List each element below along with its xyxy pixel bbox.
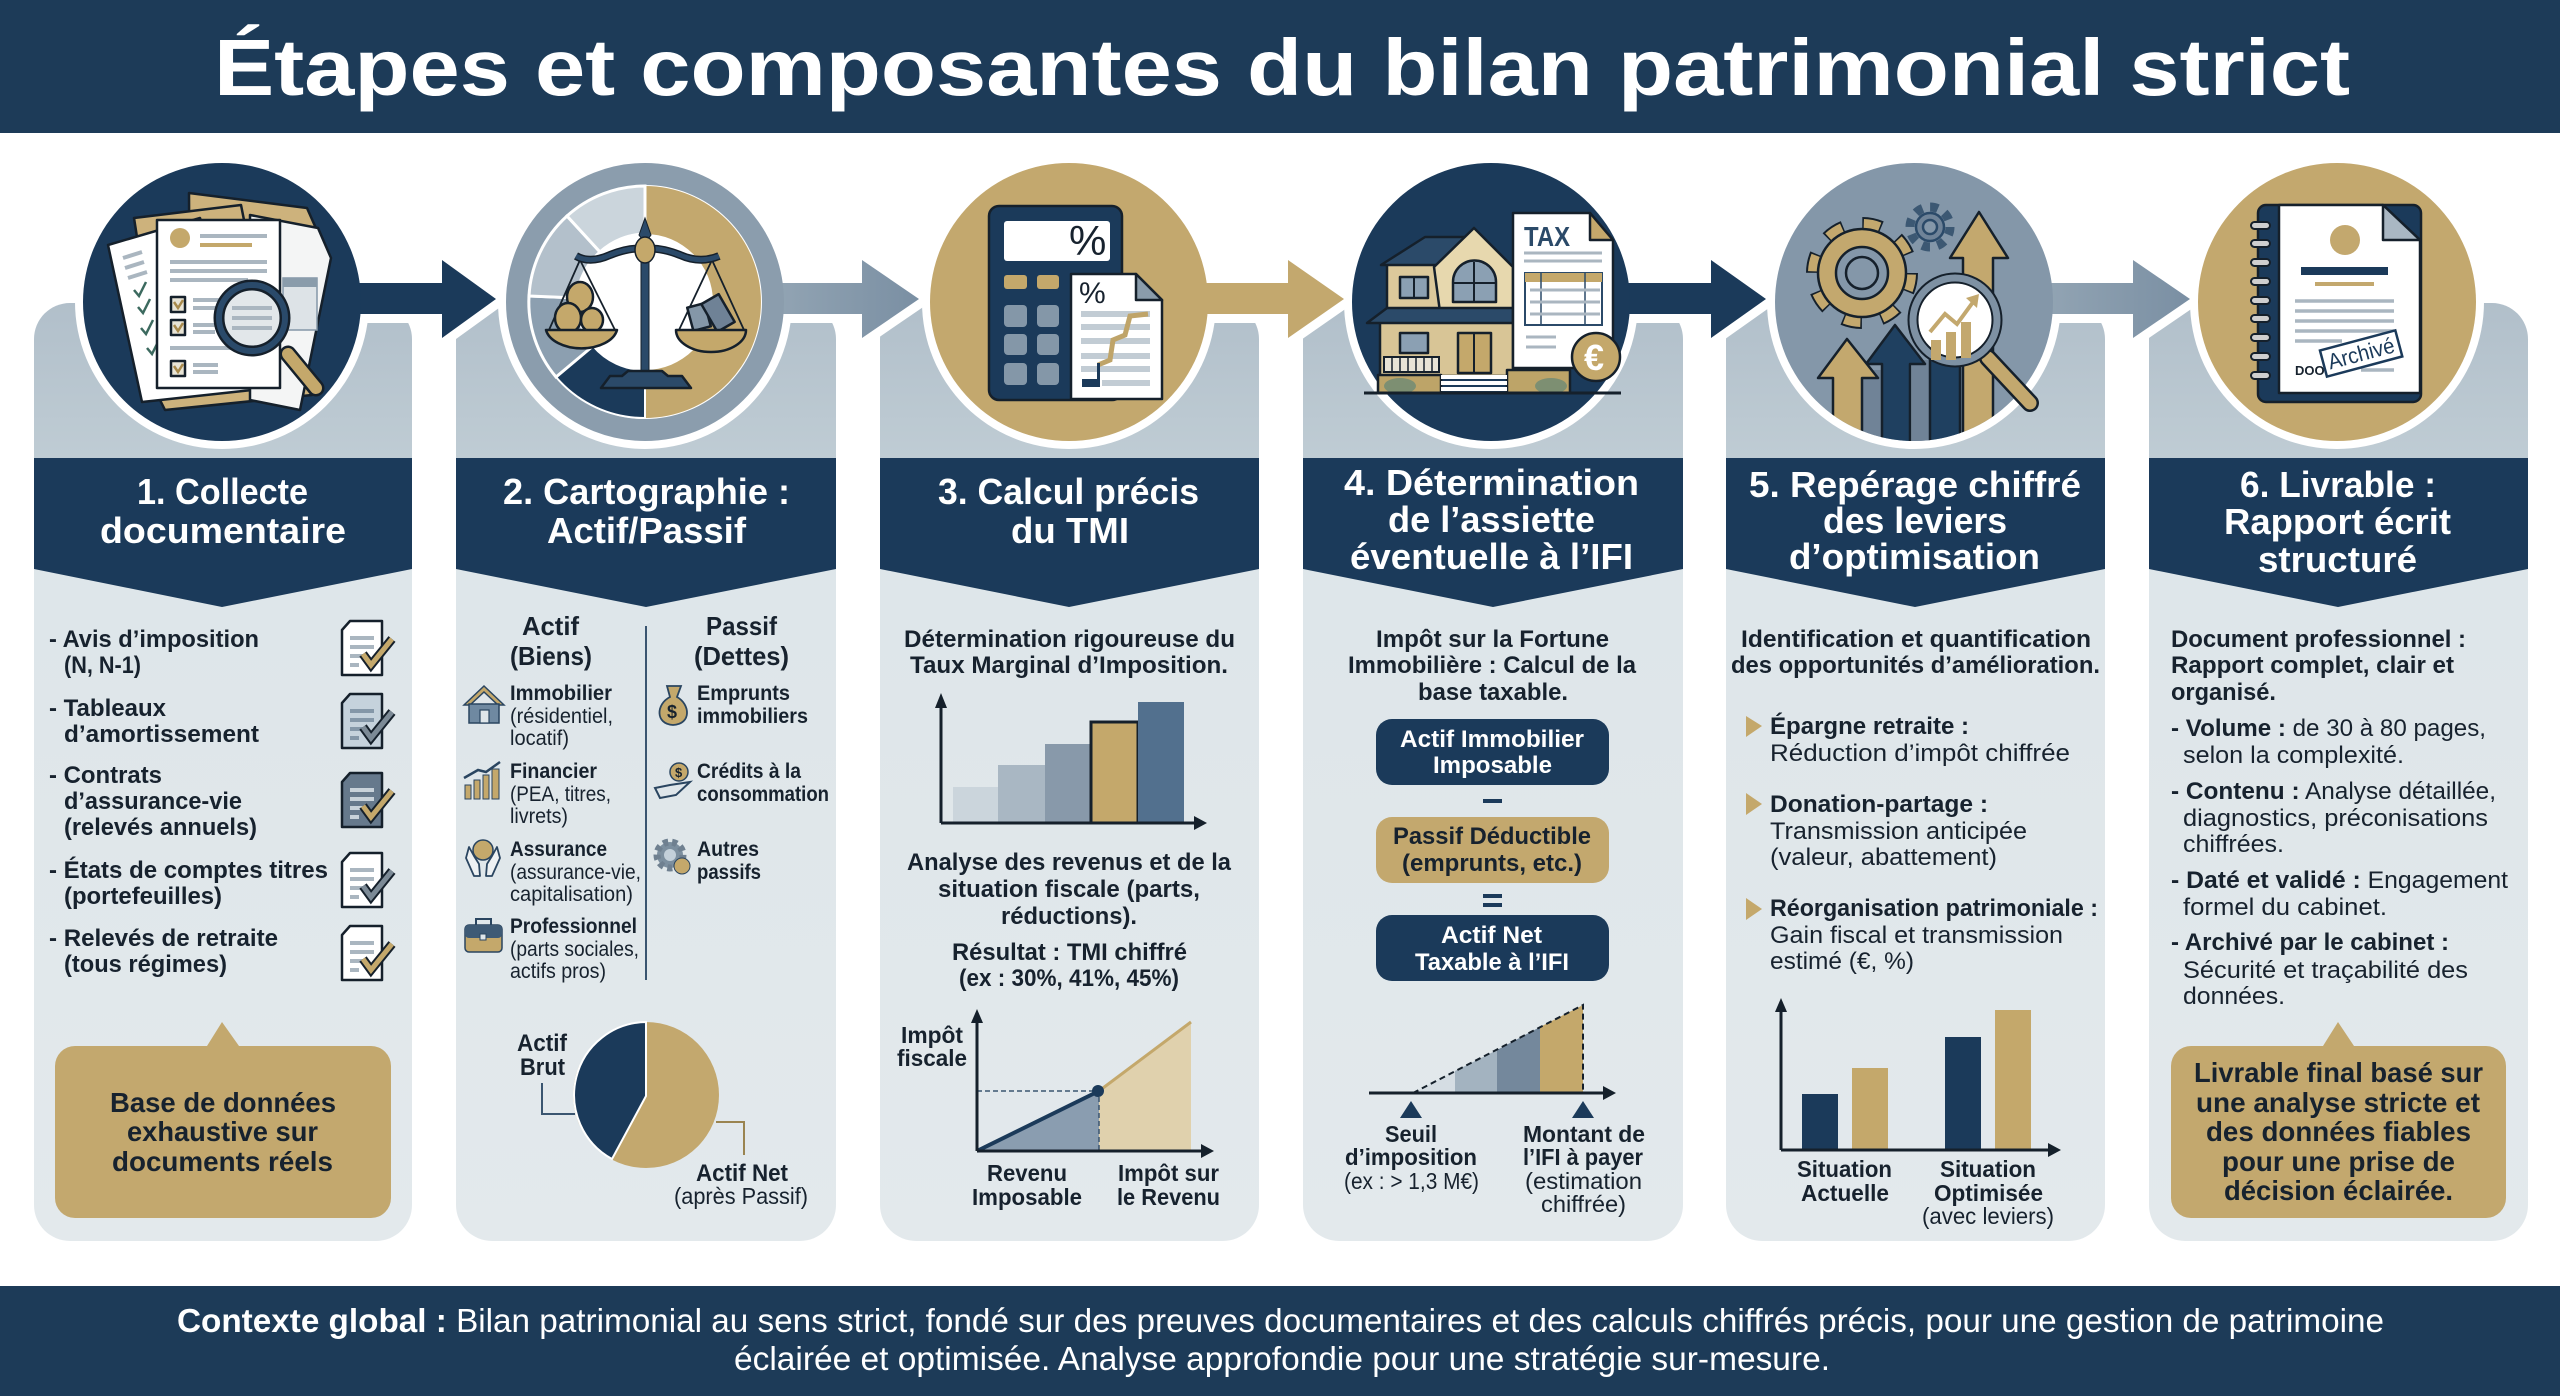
column heads: (Biens) [510,641,592,671]
lever list: Transmission anticipée [1770,818,2027,845]
intro text [1348,626,1637,706]
analysis text [907,849,1232,992]
callout: base de données [55,1022,391,1218]
document list: - États de comptes titres [49,856,328,884]
heading: step 4: éventuelle à l’IFI [1350,536,1633,577]
callout: livrable final: pour une prise de [2222,1146,2455,1177]
document list: - Contrats [49,762,162,789]
passif list: immobiliers [697,705,808,728]
bar chart: situations: Situation [1797,1156,1892,1182]
analysis text: Analyse des revenus et de la [907,849,1232,876]
icon: hand with coin [655,763,690,798]
report details: données. [2183,983,2285,1010]
icon: money bag [659,686,687,725]
callout: livrable final [2171,1022,2506,1218]
column heads: (Dettes) [694,641,789,671]
intro text: Rapport complet, clair et [2171,652,2454,679]
heading: step 6: structuré [2258,539,2417,580]
intro text: Impôt sur la Fortune [1376,626,1609,653]
lever list: Réorganisation patrimoniale : [1770,895,2098,922]
column heads: Passif [706,611,777,641]
chart: barème IFI: Seuil [1385,1121,1437,1147]
report details: - Contenu : Analyse détaillée, [2171,778,2496,805]
actif list: (parts sociales, [510,938,639,961]
passif list: Emprunts [697,682,790,705]
document list: (relevés annuels) [64,814,257,841]
passif list: Autres [697,838,759,861]
icon: document check 1 [342,621,392,675]
formula box: actif net taxable [1376,915,1609,981]
chart: barème IFI: (estimation [1525,1168,1642,1194]
lever list: Donation-partage : [1770,791,1988,818]
icon: hands with coin [466,840,500,876]
icon: balance scale with donut [517,174,773,430]
formula box: actif net taxable: Actif Net [1441,922,1542,949]
intro text: Identification et quantification [1741,626,2091,653]
chart: barème IFI: (ex : > 1,3 M€) [1344,1168,1479,1194]
callout: base de données: documents réels [112,1146,333,1177]
formula box: passif déductible [1376,817,1609,883]
formula box: actif imposable: Actif Immobilier [1400,726,1584,753]
callout: base de données: Base de données [110,1087,336,1118]
panel: 2 cartographie actif passif [456,303,836,1241]
chart: barème IFI: d’imposition [1345,1144,1477,1170]
arrow: step 1 to 2 [340,260,496,338]
report details: - Archivé par le cabinet : [2171,929,2449,956]
heading: step 6: Rapport écrit [2224,501,2451,542]
pie chart: actif brut vs net: Actif Net [696,1160,788,1187]
footer: contexte global [0,1286,2560,1396]
icon: documents and magnifier [83,163,361,441]
report details: chiffrées. [2183,831,2284,858]
passif list: consommation [697,783,829,806]
formula box: actif imposable [1376,719,1609,785]
heading: step 3 [880,458,1259,607]
column heads [510,611,789,671]
heading: step 1 [34,458,412,607]
lever list: estimé (€, %) [1770,948,1914,975]
document list: d’amortissement [64,721,259,748]
callout: livrable final: une analyse stricte et [2196,1087,2480,1118]
heading: step 2: Actif/Passif [547,510,747,551]
actif list: (PEA, titres, [510,783,611,806]
document list: (portefeuilles) [64,883,222,910]
document list: - Avis d’imposition [49,626,259,653]
pie chart: actif brut vs net: Actif [517,1030,568,1057]
lever list: Réduction d’impôt chiffrée [1770,740,2070,767]
intro text: base taxable. [1418,679,1568,706]
report details: - Daté et validé : Engagement [2171,867,2508,894]
icon: house [464,686,504,723]
icon: house and tax document: € [1584,337,1604,378]
title banner [0,0,2560,133]
passif list [697,682,829,884]
heading: step 4: de l’assiette [1388,499,1595,540]
analysis text: réductions). [1001,903,1137,930]
intro text [2171,626,2466,706]
actif list: actifs pros) [510,960,606,983]
document list: d’assurance-vie [64,788,242,815]
heading: step 4 [1303,458,1683,607]
icon: house and tax document: TAX [1524,221,1570,252]
lever list: Gain fiscal et transmission [1770,922,2063,949]
icon: archived report notebook: Archivé [2325,333,2397,374]
icon: document check 5 [342,926,392,980]
analysis text: Résultat : TMI chiffré [952,939,1187,966]
document list: - Tableaux [49,695,167,722]
icon: house and tax document [1352,163,1630,441]
panel: 4 assiette IFI [1303,303,1683,1241]
area chart: impôt: Imposable [972,1184,1082,1210]
icon: gears, arrows and magnifier [1775,163,2053,445]
chart: barème IFI [1344,1005,1645,1217]
actif list: (résidentiel, [510,705,613,728]
chart: barème IFI: l’IFI à payer [1523,1144,1643,1170]
actif list: Assurance [510,838,607,861]
heading: step 3: 3. Calcul précis [938,471,1199,512]
icon: calculator and percent document: % [1069,217,1106,264]
icon: document check 2 [342,694,392,748]
passif list: Crédits à la [697,760,801,783]
report details: - Volume : de 30 à 80 pages, [2171,715,2486,742]
document list: - Relevés de retraite [49,925,278,952]
intro text: Document professionnel : [2171,626,2466,653]
heading: step 6 [2149,458,2528,607]
bar chart: situations [1775,998,2061,1229]
panel: 3 calcul du TMI [880,303,1259,1241]
lever list [1746,712,2098,975]
arrow: step 4 to 5 [1620,260,1766,338]
report details: Sécurité et traçabilité des [2183,957,2468,984]
heading: step 2 [456,458,836,607]
icon: money bag: $ [667,702,677,722]
bar chart: situations: Optimisée [1934,1180,2043,1206]
callout: livrable final: Livrable final basé sur [2194,1057,2483,1088]
heading: step 6: 6. Livrable : [2240,464,2436,505]
heading: step 5 [1726,458,2105,607]
analysis text: situation fiscale (parts, [938,876,1200,903]
actif list [510,682,641,983]
report details: diagnostics, préconisations [2183,805,2488,832]
formula box: passif déductible: Passif Déductible [1393,823,1591,850]
lever list: (valeur, abattement) [1770,844,1997,871]
actif list: Financier [510,760,597,783]
document list [49,626,328,978]
intro text: Taux Marginal d’Imposition. [910,652,1228,679]
actif list: locatif) [510,727,569,750]
icon: archived report notebook: DOO [2295,363,2325,378]
actif list: Professionnel [510,915,637,938]
formula box: actif imposable: Imposable [1433,752,1552,779]
passif list: passifs [697,861,761,884]
heading: step 5: d’optimisation [1789,536,2040,577]
heading: step 5: 5. Repérage chiffré [1749,464,2081,505]
analysis text: (ex : 30%, 41%, 45%) [959,965,1179,992]
chart: barème IFI: chiffrée) [1541,1191,1626,1217]
intro text [1731,626,2100,679]
area chart: impôt: le Revenu [1117,1184,1220,1210]
bar chart: situations: (avec leviers) [1922,1203,2054,1229]
panel: 6 livrable [2149,303,2528,1241]
bar chart: situations: Actuelle [1801,1180,1889,1206]
icon: document check 3 [342,773,392,827]
formula box: passif déductible: (emprunts, etc.) [1402,850,1582,877]
formula box: actif net taxable: Taxable à l’IFI [1415,949,1569,976]
area chart: impôt: Impôt [901,1022,963,1048]
intro text: organisé. [2171,679,2276,706]
report details: selon la complexité. [2183,742,2404,769]
bar chart: tranches [935,693,1207,830]
icon: hand with coin: $ [675,765,683,780]
area chart: impôt: Impôt sur [1118,1160,1219,1186]
pie chart: actif brut vs net: (après Passif) [674,1183,808,1209]
pie chart: actif brut vs net: Brut [520,1054,565,1081]
callout: livrable final: décision éclairée. [2224,1175,2453,1206]
heading: step 2: 2. Cartographie : [503,471,790,512]
chart: barème IFI: Montant de [1523,1121,1645,1147]
report details [2171,715,2508,1010]
intro text: Détermination rigoureuse du [904,626,1235,653]
footer: contexte global: éclairée et optimisée. Analyse approfondie pour une stratégie sur-mesure. [734,1340,1830,1377]
document list: (tous régimes) [64,951,227,978]
actif list: (assurance-vie, [510,861,641,884]
panel: 5 leviers d'optimisation [1726,303,2105,1241]
intro text: Immobilière : Calcul de la [1348,652,1637,679]
arrow: step 2 to 3 [770,260,919,338]
heading: step 1: 1. Collecte [137,471,308,512]
column heads: Actif [522,611,579,641]
document list: (N, N-1) [64,652,141,679]
heading: step 5: des leviers [1823,500,2007,541]
icon: archived report notebook [2198,163,2476,441]
heading: step 4: 4. Détermination [1344,462,1639,503]
report details: formel du cabinet. [2183,894,2387,921]
icon: gear and coin [657,842,690,874]
arrow: step 3 to 4 [1190,260,1344,338]
actif list: Immobilier [510,682,612,705]
icon: calculator and percent document [930,163,1208,441]
heading: step 3: du TMI [1011,510,1129,551]
lever list: Épargne retraite : [1770,712,1969,740]
heading: step 1: documentaire [100,510,346,551]
area chart: impôt: Revenu [987,1160,1067,1186]
footer: contexte global: Contexte global : Bilan patrimonial au sens strict, fondé sur des preuves documentaires et des calculs chiffrés précis, pour une gestion de patrimoine [177,1302,2384,1339]
intro text [904,626,1235,679]
intro text: des opportunités d’amélioration. [1731,652,2100,679]
actif list: capitalisation) [510,883,633,906]
callout: livrable final: des données fiables [2206,1116,2471,1147]
area chart: impôt: fiscale [897,1045,967,1071]
bar chart: situations: Situation [1940,1156,2036,1182]
title banner: Étapes et composantes du bilan patrimonial strict [214,23,2350,112]
pie chart: actif brut vs net [517,1022,808,1209]
callout: base de données: exhaustive sur [127,1116,318,1147]
actif list: livrets) [510,805,568,828]
icon: calculator and percent document: % [1079,277,1106,310]
area chart: impôt [897,1009,1220,1210]
icon: document check 4 [342,853,392,907]
panel: 1 collecte documentaire [34,303,412,1241]
arrow: step 5 to 6 [2040,260,2190,338]
icon: briefcase [465,919,502,952]
icon: financial chart [464,762,500,799]
